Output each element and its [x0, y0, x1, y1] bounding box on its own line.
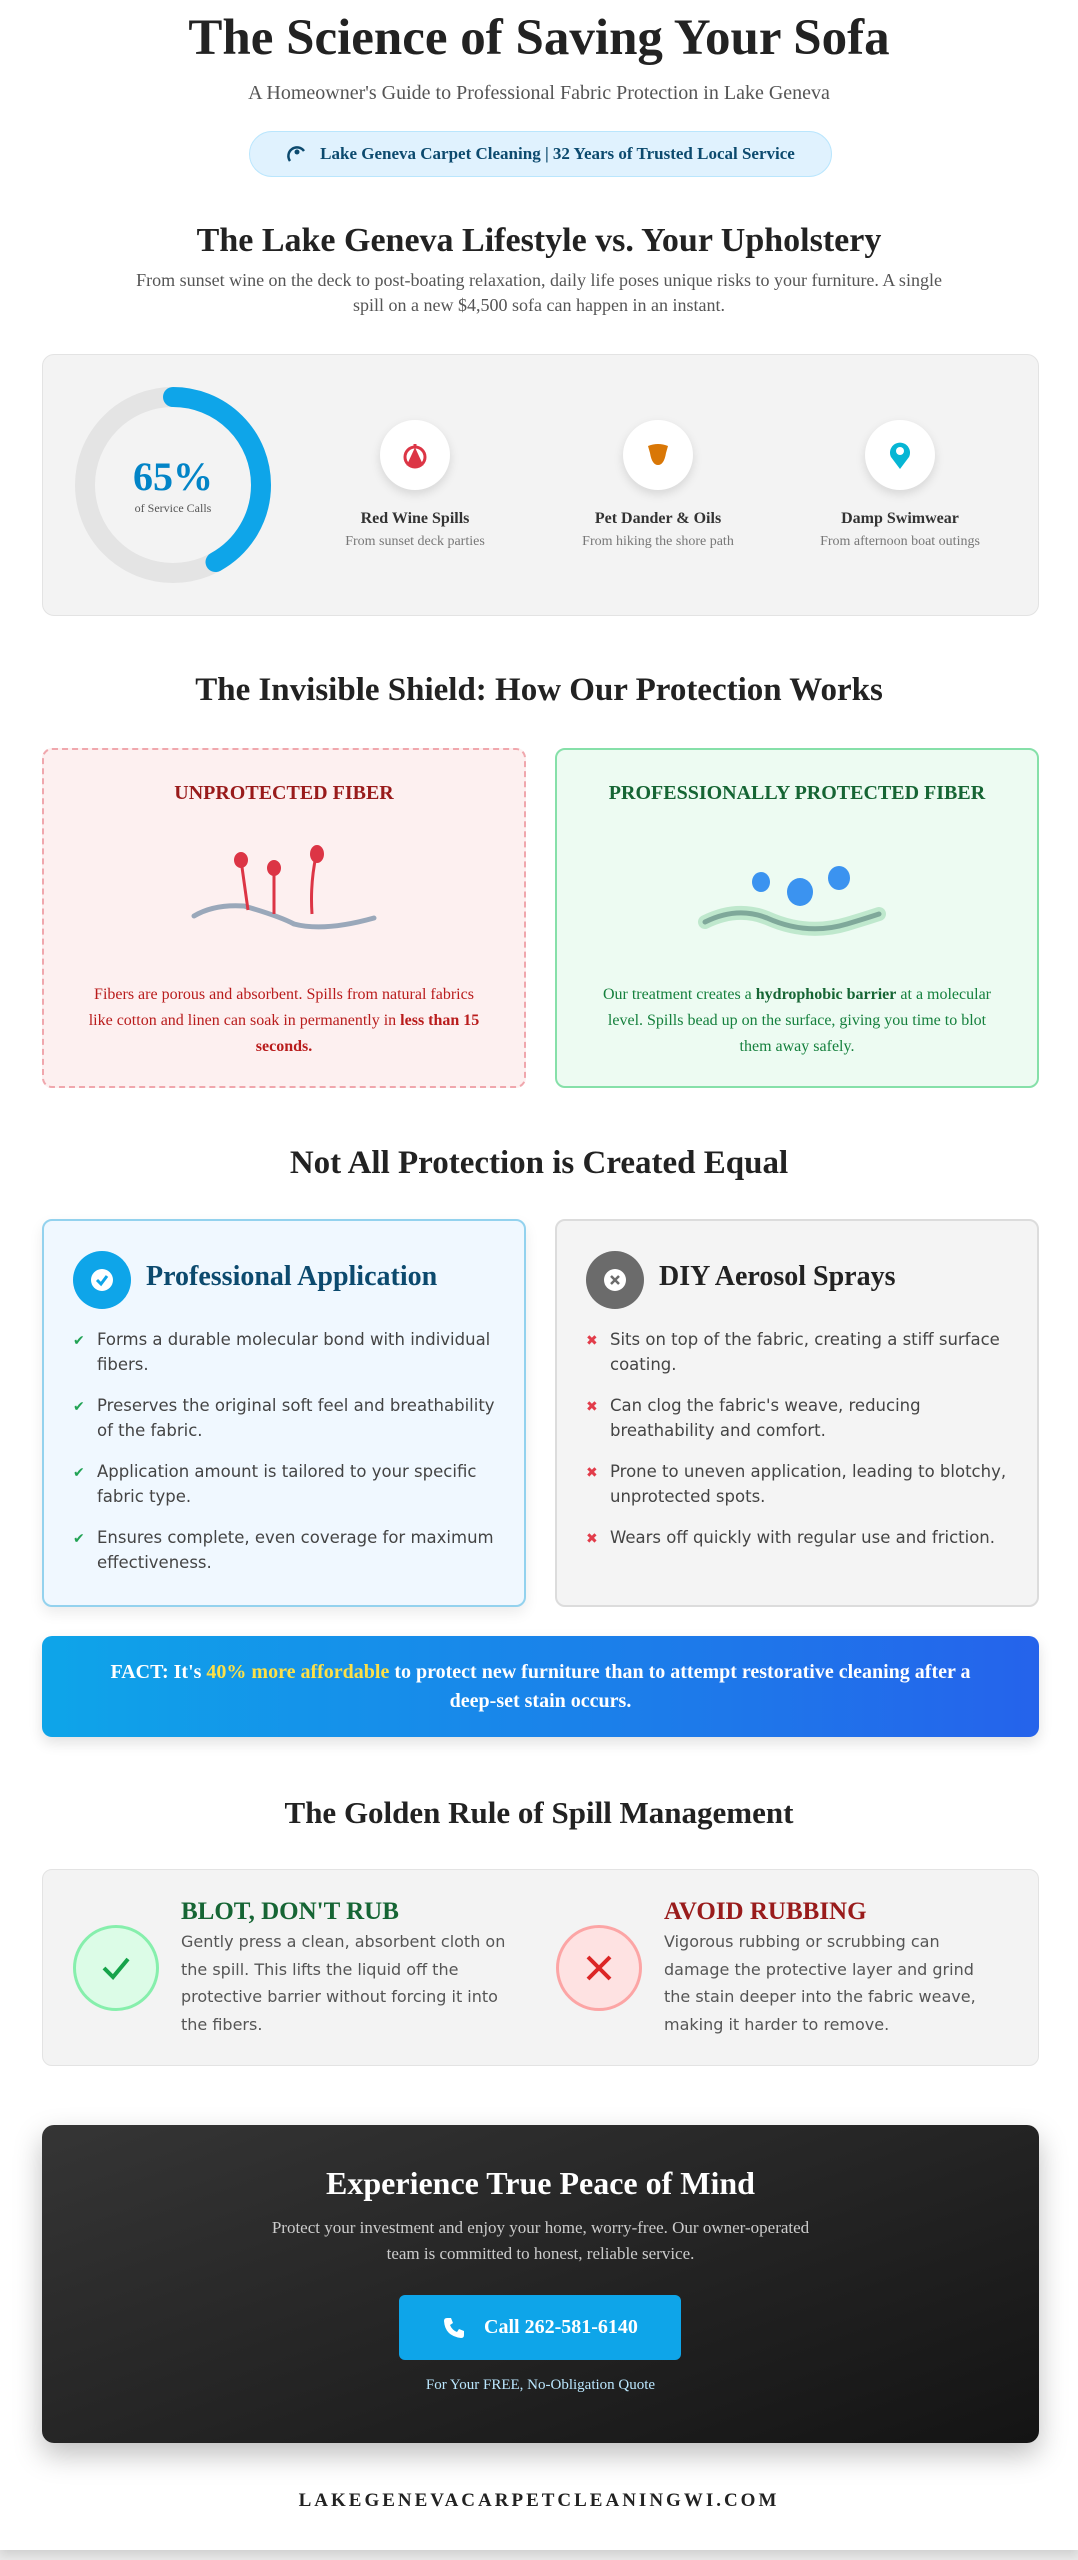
list: Prone to uneven application, leading to blotchy, unprotected spots. [610, 1462, 1006, 1506]
list: Forms a durable molecular bond with individual fibers. [97, 1330, 490, 1374]
item: red wine: Red Wine Spills [361, 510, 469, 527]
icon: wine [380, 420, 450, 490]
item: red wine [345, 420, 485, 549]
donut chart: of Service Calls [135, 501, 211, 515]
panel: DIY [555, 1219, 1039, 1607]
CTA panel [42, 2125, 1039, 2443]
list: Ensures complete, even coverage for maximum effectiveness. [97, 1528, 494, 1572]
card text: Fibers are porous and absorbent. Spills from natural fabrics like cotton and linen can soak in permanently in less than 15 seconds. [89, 986, 479, 1055]
list: ✔ [73, 1465, 85, 1481]
panel: golden rule [42, 1869, 1039, 2066]
icon: phone [444, 2318, 464, 2338]
icon: check circle [73, 1251, 131, 1309]
badge [249, 131, 832, 177]
list: ✔ [73, 1333, 85, 1349]
icon: x [556, 1925, 642, 2011]
list: ✖ [586, 1531, 598, 1547]
fact banner: FACT: It's 40% more affordable to protect new furniture than to attempt restorative cleaning after a deep-set stain occurs. [110, 1660, 971, 1712]
text: lifestyle intro: From sunset wine on the deck to post-boating relaxation, daily life poses unique risks to your furniture. A single spill on a new $4,500 sofa can happen in an instant. [136, 270, 942, 315]
icon: x circle [586, 1251, 644, 1309]
list [73, 1330, 495, 1572]
panel: protected [555, 748, 1039, 1088]
title: The Science of Saving Your Sofa [188, 10, 890, 66]
card text: Our treatment creates a hydrophobic barrier at a molecular level. Spills bead up on the surface, giving you time to blot them away safely. [603, 986, 991, 1055]
CTA heading: Experience True Peace of Mind [326, 2165, 755, 2201]
call button [399, 2295, 681, 2360]
blot text block: Gently press a clean, absorbent cloth on the spill. This lifts the liquid off the protective barrier without forcing it into the fibers. [181, 1932, 505, 2034]
item: pet dander [582, 420, 734, 549]
card title: UNPROTECTED FIBER [174, 782, 394, 804]
list [586, 1330, 1006, 1547]
subtitle: A Homeowner's Guide to Professional Fabric Protection in Lake Geneva [248, 82, 830, 104]
illustration: beading droplets [698, 866, 886, 936]
avoid text block: Vigorous rubbing or scrubbing can damage the protective layer and grind the stain deeper into the fabric weave, making it harder to remove. [664, 1932, 976, 2034]
donut chart [75, 387, 271, 583]
card title: PROFESSIONALLY PROTECTED FIBER [609, 782, 985, 804]
call button: Call 262-581-6140 [484, 2316, 638, 2338]
item: pet dander: Pet Dander & Oils [595, 510, 721, 527]
icon: gauge [287, 146, 305, 162]
quote note: For Your FREE, No-Obligation Quote [426, 2377, 655, 2393]
heading: shield: The Invisible Shield: How Our Protection Works [195, 672, 883, 708]
list: ✖ [586, 1333, 598, 1349]
icon: check [73, 1925, 159, 2011]
heading: DIY Aerosol Sprays [659, 1261, 895, 1292]
item: swimwear: From afternoon boat outings [820, 534, 980, 549]
list: ✔ [73, 1399, 85, 1415]
list: Sits on top of the fabric, creating a stiff surface coating. [610, 1330, 1000, 1374]
heading: comparison: Not All Protection is Created Equal [290, 1145, 788, 1181]
list: Application amount is tailored to your specific fabric type. [97, 1462, 476, 1506]
panel: risks [42, 354, 1039, 616]
list: ✔ [73, 1531, 85, 1547]
icon: pet [623, 420, 693, 490]
heading: Professional Application [146, 1261, 437, 1292]
list: Wears off quickly with regular use and friction. [610, 1528, 995, 1547]
icon: location [865, 420, 935, 490]
avoid text block: AVOID RUBBING [664, 1898, 867, 1925]
heading: lifestyle: The Lake Geneva Lifestyle vs. Your Upholstery [197, 222, 881, 259]
list: ✖ [586, 1465, 598, 1481]
donut chart: 65% [133, 454, 213, 499]
illustration: absorbing fiber [192, 845, 376, 930]
fact banner [42, 1636, 1039, 1737]
panel: unprotected [42, 748, 526, 1088]
list: Preserves the original soft feel and breathability of the fabric. [97, 1396, 495, 1440]
blot text block: BLOT, DON'T RUB [181, 1898, 399, 1925]
item: pet dander: From hiking the shore path [582, 534, 734, 549]
item: swimwear [820, 420, 980, 549]
heading: golden rule: The Golden Rule of Spill Management [285, 1795, 793, 1830]
badge: Lake Geneva Carpet Cleaning | 32 Years of Trusted Local Service [320, 144, 795, 163]
list: ✖ [586, 1399, 598, 1415]
footer: LAKEGENEVACARPETCLEANINGWI.COM [299, 2490, 779, 2511]
list: Can clog the fabric's weave, reducing breathability and comfort. [610, 1396, 921, 1440]
item: swimwear: Damp Swimwear [841, 510, 959, 527]
panel: professional [42, 1219, 526, 1607]
CTA text: Protect your investment and enjoy your home, worry-free. Our owner-operated team is committed to honest, reliable service. [272, 2218, 809, 2263]
item: red wine: From sunset deck parties [345, 534, 485, 549]
